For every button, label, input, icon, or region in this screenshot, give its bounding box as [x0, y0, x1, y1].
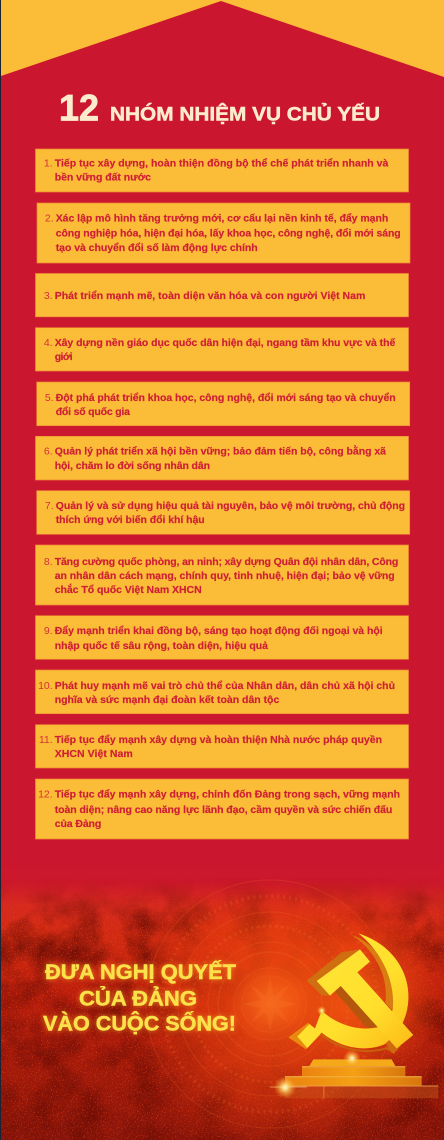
sickle inner bevel — [352, 935, 393, 1011]
task 1 — [36, 149, 408, 192]
task 7: 7. — [45, 500, 54, 512]
task 12: 12. — [38, 788, 53, 800]
yellow roof header — [0, 0, 444, 77]
task 2 — [37, 203, 410, 263]
task 3 — [36, 274, 408, 317]
task 8: an nhân dân cách mạng, chính quy, tinh nhuệ, hiện đại; bảo vệ vững — [55, 570, 395, 582]
task 12: toàn diện; nâng cao năng lực lãnh đạo, cầm quyền và sức chiến đấu — [55, 804, 392, 816]
task 7 — [37, 491, 410, 534]
task 10: Phát huy mạnh mẽ vai trò chủ thể của Nhân dân, dân chủ xã hội chủ — [55, 680, 395, 692]
task 9 — [36, 616, 408, 659]
task 5: 5. — [45, 392, 54, 404]
task 2: 2. — [45, 212, 54, 224]
left edge strip — [0, 0, 1, 1140]
sickle base side — [288, 1023, 320, 1049]
task 1: 1. — [44, 158, 53, 170]
task 11: XHCN Việt Nam — [55, 748, 133, 760]
task 8: 8. — [44, 556, 53, 568]
slogan — [43, 961, 236, 1036]
title number: 12 — [59, 88, 99, 129]
task 5: Đột phá phát triển khoa học, công nghệ, đổi mới sáng tạo và chuyển — [56, 392, 396, 404]
task 5: đổi số quốc gia — [56, 406, 130, 418]
task 2: tạo và chuyển đổi số làm động lực chính — [56, 242, 258, 254]
hammer front — [317, 949, 413, 1048]
task 6 — [36, 436, 408, 480]
pedestal — [285, 1059, 438, 1098]
task 8: chắc Tổ quốc Việt Nam XHCN — [55, 583, 202, 596]
task 5 — [37, 382, 410, 426]
slogan: CỦA ĐẢNG — [79, 986, 197, 1010]
hammer dark sides — [307, 949, 360, 996]
task 12 — [36, 779, 408, 839]
sickle front — [297, 933, 408, 1048]
task 10: nghĩa và sức mạnh đại đoàn kết toàn dân tộc — [55, 694, 279, 706]
task 11: 11. — [39, 734, 53, 746]
task 6: 6. — [44, 446, 53, 458]
task 6: Quản lý phát triển xã hội bền vững; bảo đảm tiến bộ, công bằng xã — [55, 444, 386, 458]
task 9: 9. — [44, 625, 53, 637]
task 7: thích ứng với biến đổi khí hậu — [56, 514, 205, 526]
bronze drum pattern — [146, 880, 394, 1128]
task 12: Tiếp tục đẩy mạnh xây dựng, chỉnh đốn Đảng trong sạch, vững mạnh — [55, 788, 400, 800]
slogan: ĐƯA NGHỊ QUYẾT — [45, 961, 236, 984]
title — [59, 88, 380, 129]
task 11 — [36, 725, 408, 768]
task 2: công nghiệp hóa, hiện đại hóa, lấy khoa học, công nghệ, đổi mới sáng — [56, 228, 401, 240]
title words: NHÓM NHIỆM VỤ CHỦ YẾU — [110, 104, 380, 126]
task 2: Xác lập mô hình tăng trưởng mới, cơ cấu lại nền kinh tế, đẩy mạnh — [56, 212, 388, 224]
task 3: 3. — [44, 290, 53, 302]
glints — [343, 1050, 361, 1067]
task 11: Tiếp tục đẩy mạnh xây dựng và hoàn thiện Nhà nước pháp quyền — [55, 734, 382, 746]
task 10: 10. — [38, 680, 53, 692]
task 3: Phát triển mạnh mẽ, toàn diện văn hóa và con người Việt Nam — [55, 290, 365, 302]
task 4: 4. — [44, 337, 53, 349]
task 8: Tăng cường quốc phòng, an ninh; xây dựng Quân đội nhân dân, Công — [55, 556, 398, 568]
task 1: Tiếp tục xây dựng, hoàn thiện đồng bộ thể chế phát triển nhanh và — [55, 158, 388, 170]
slogan: VÀO CUỘC SỐNG! — [43, 1012, 236, 1036]
task 9: nhập quốc tế sâu rộng, toàn diện, hiệu quả — [55, 640, 268, 652]
task 7: Quản lý và sử dụng hiệu quả tài nguyên, bảo vệ môi trường, chủ động — [56, 500, 405, 512]
footer artwork background — [0, 860, 444, 1140]
task 9: Đẩy mạnh triển khai đồng bộ, sáng tạo hoạt động đối ngoại và hội — [55, 625, 383, 637]
task 10 — [36, 670, 408, 714]
task 6: hội, chăm lo đời sống nhân dân — [55, 460, 210, 472]
task 4: Xây dựng nền giáo dục quốc dân hiện đại, ngang tầm khu vực và thế — [55, 337, 395, 349]
icon: hammer and sickle on pedestal — [270, 933, 438, 1099]
task 8 — [36, 545, 408, 605]
task 1: bền vững đất nước — [55, 172, 151, 184]
task 4: giới — [55, 351, 73, 363]
task 4 — [36, 328, 408, 371]
task 12: của Đảng — [55, 818, 101, 830]
